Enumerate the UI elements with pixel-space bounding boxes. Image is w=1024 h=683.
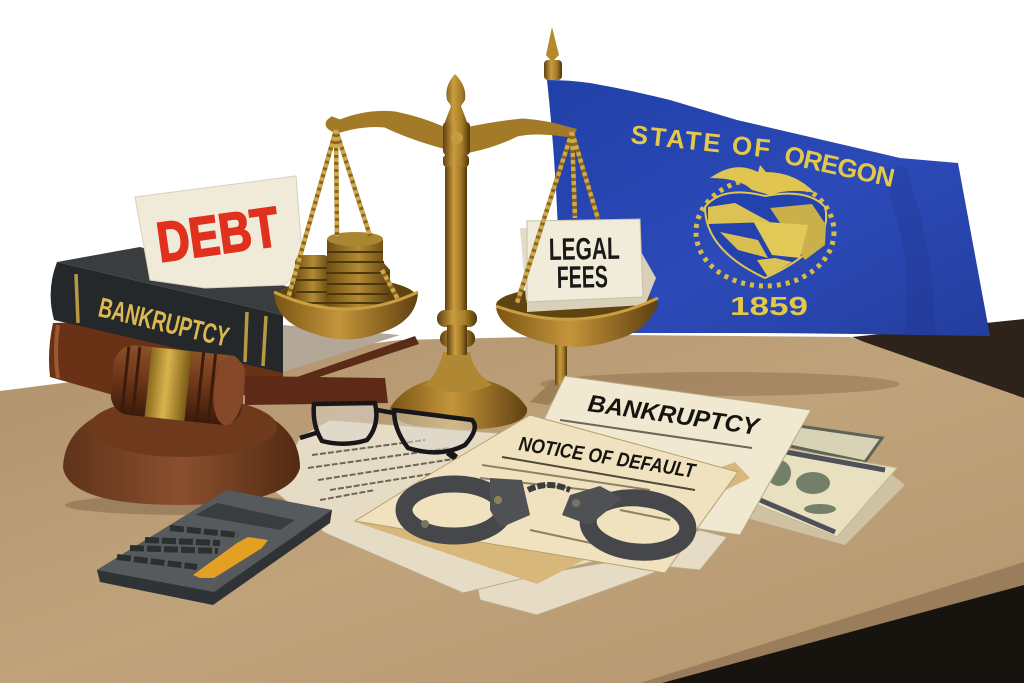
gavel and sound block <box>63 336 419 505</box>
left scale pan <box>274 130 418 340</box>
flag pole finial <box>544 27 562 80</box>
upper black book <box>51 247 400 373</box>
flag of Oregon: OREGON <box>782 140 898 193</box>
legal fees cards: LEGAL <box>549 231 620 267</box>
book stack <box>49 247 400 395</box>
gavel head <box>109 343 247 427</box>
notice of default document <box>355 415 750 584</box>
base <box>390 380 527 430</box>
handcuffs <box>404 478 690 556</box>
money <box>743 425 905 545</box>
upper black book: BANKRUPTCY <box>96 292 232 353</box>
bankruptcy notice document: BANKRUPTCY <box>586 390 762 441</box>
column <box>445 150 467 315</box>
coins <box>295 232 390 312</box>
state seal <box>696 165 834 286</box>
right support post <box>530 380 575 405</box>
notice of default document: NOTICE OF DEFAULT <box>517 433 698 483</box>
debt card: DEBT <box>153 195 282 274</box>
dark furniture behind desk <box>852 319 1024 400</box>
lower brown book <box>49 322 283 395</box>
flag of Oregon: 1859 <box>730 291 808 321</box>
glasses <box>300 403 475 458</box>
left chains <box>287 130 400 303</box>
flag of Oregon <box>547 80 990 336</box>
balance scale <box>274 74 658 430</box>
flag of Oregon: STATE OF <box>629 119 772 164</box>
desk <box>0 335 1024 683</box>
sound block <box>63 404 300 505</box>
handwriting <box>308 440 460 500</box>
right chains <box>572 132 598 219</box>
legal fees cards <box>520 219 656 312</box>
legal fees cards: FEES <box>557 259 608 295</box>
finial <box>442 74 470 128</box>
right scale pan <box>496 132 658 347</box>
beam <box>327 112 443 147</box>
handles <box>297 336 419 380</box>
bankruptcy notice document <box>505 376 811 535</box>
calculator <box>97 490 332 605</box>
debt card <box>135 176 303 288</box>
paper: handwritten letter and stacked sheets <box>273 420 727 615</box>
